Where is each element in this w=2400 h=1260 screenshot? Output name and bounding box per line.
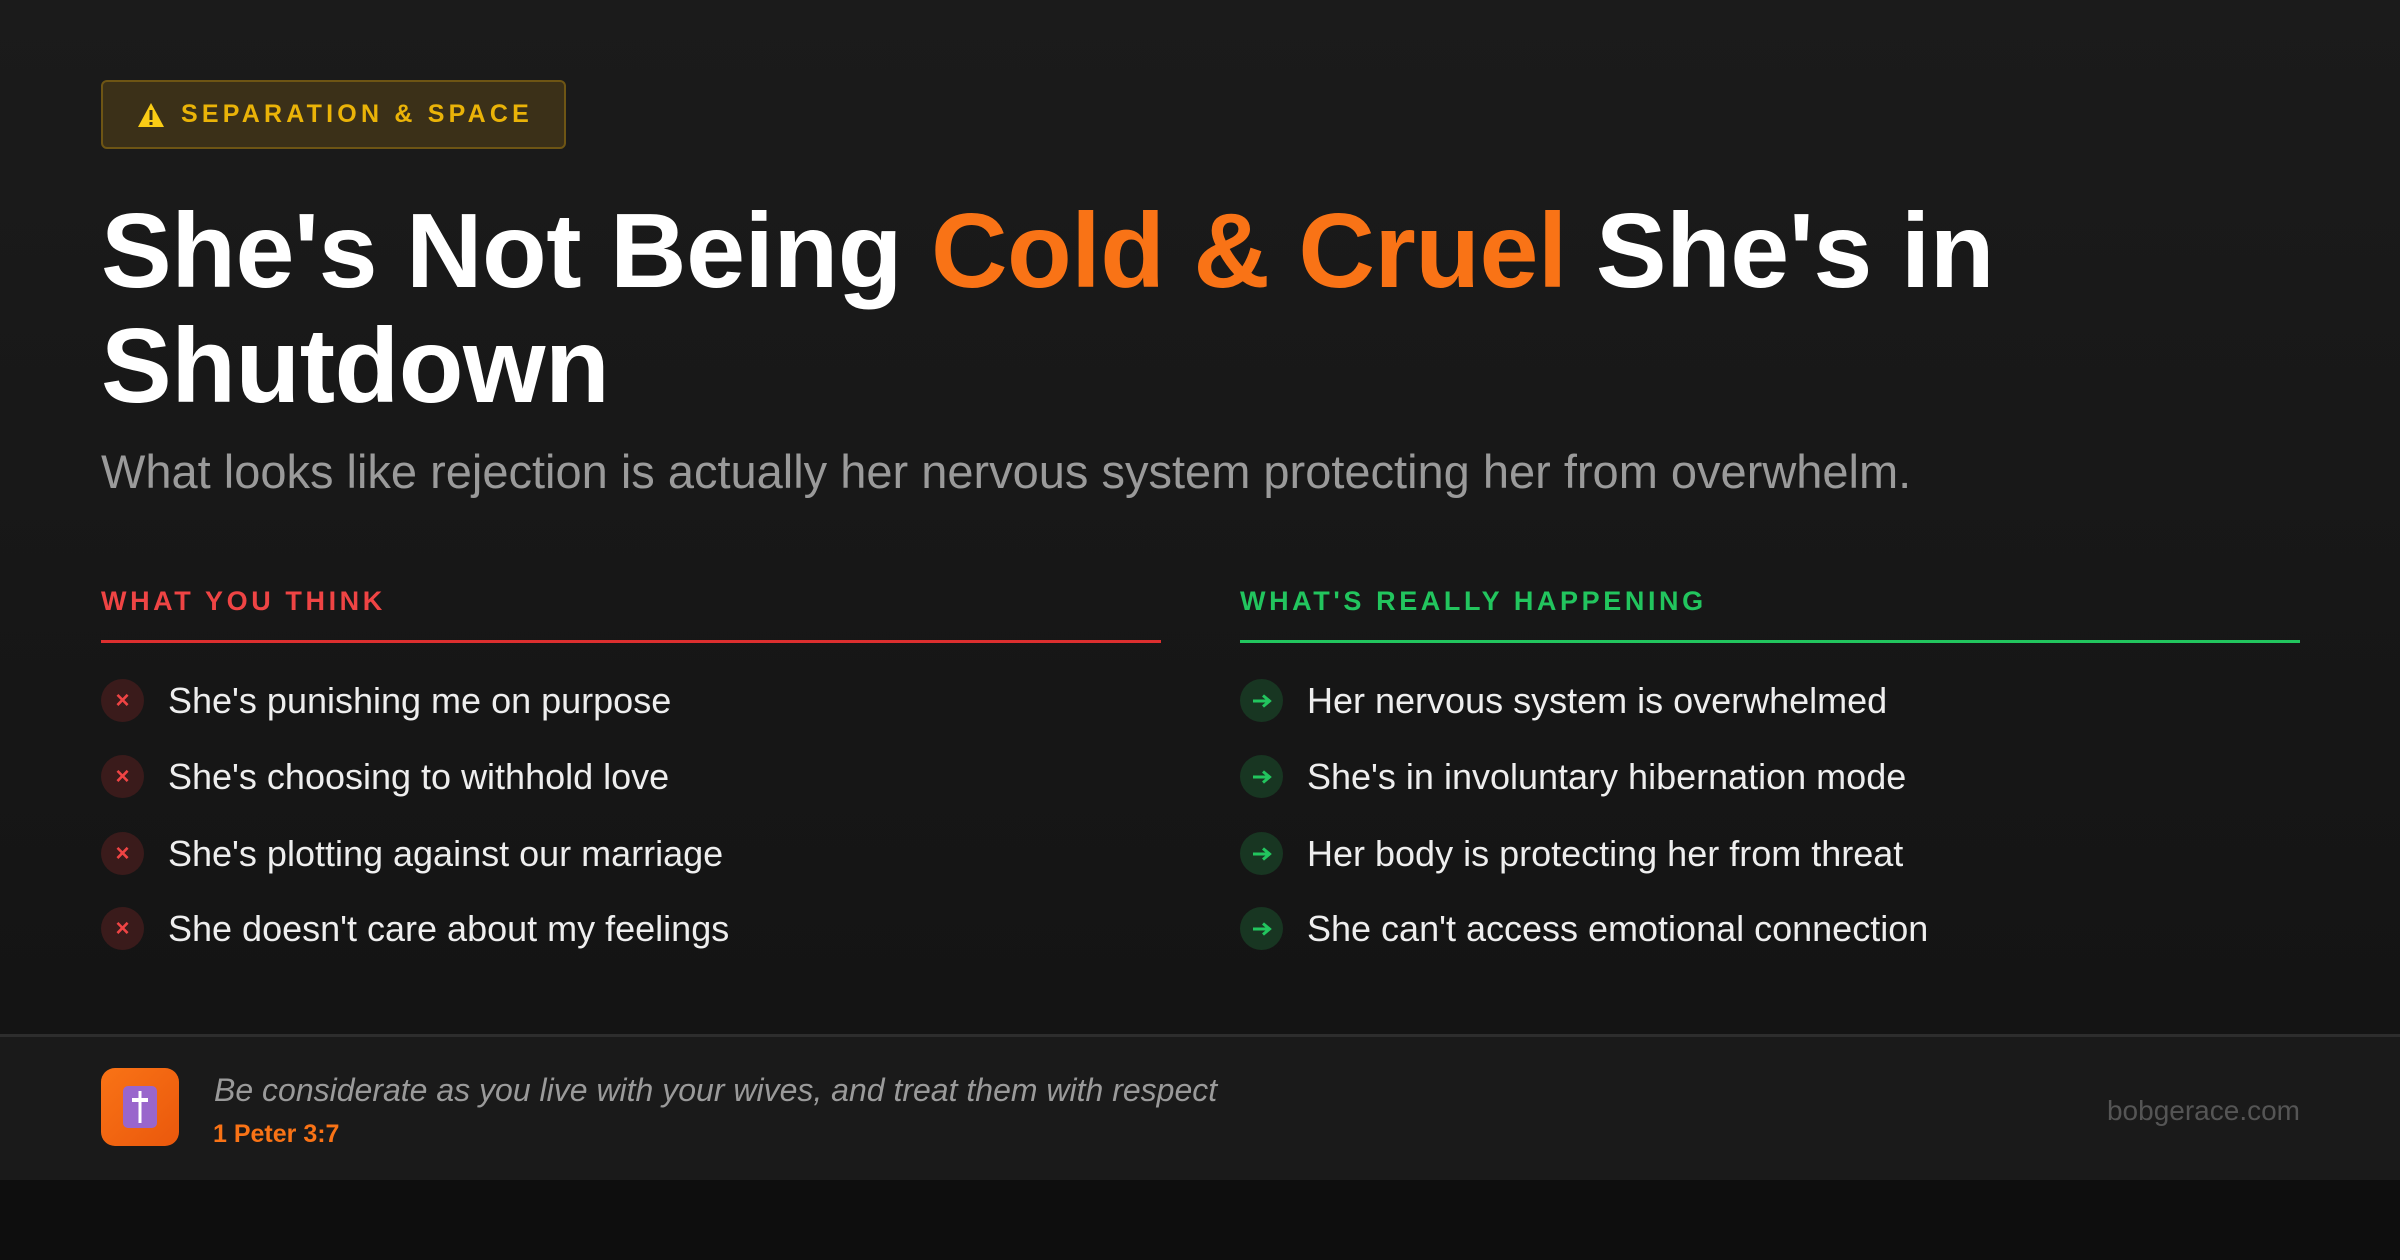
reference: 1 Peter 3:7 [213, 1120, 339, 1148]
title [101, 192, 1994, 425]
item 2: She's choosing to withhold love [168, 756, 669, 796]
item 1: × [115, 686, 130, 714]
item 4: She doesn't care about my feelings [168, 908, 729, 948]
quote: Be considerate as you live with your wives, and treat them with respect [214, 1072, 1217, 1108]
heading: what you think: WHAT YOU THINK [101, 586, 386, 616]
item 4: She can't access emotional connection [1307, 908, 1928, 948]
title: She's Not Being Cold & Cruel She's in [101, 192, 1994, 310]
subtitle: What looks like rejection is actually her nervous system protecting her from overwhelm. [101, 445, 1911, 498]
item 2: × [115, 762, 130, 790]
heading: what's really happening: WHAT'S REALLY HAPPENING [1240, 586, 1707, 616]
item 3: × [115, 840, 130, 866]
title: Shutdown [101, 307, 609, 425]
item 3: She's plotting against our marriage [168, 832, 723, 874]
badge: separation & space: SEPARATION & SPACE [181, 100, 533, 128]
footer [0, 1034, 2400, 1180]
panel: what you think [101, 586, 1161, 950]
item 1: She's punishing me on purpose [168, 680, 671, 720]
item 1: Her nervous system is overwhelmed [1307, 680, 1887, 720]
item 4: × [115, 914, 130, 942]
badge: separation & space [101, 80, 566, 149]
item 3: Her body is protecting her from threat [1307, 832, 1903, 874]
website: bobgerace.com [2107, 1095, 2300, 1126]
item 2: She's in involuntary hibernation mode [1307, 756, 1906, 796]
panel: what's really happening [1240, 586, 2300, 950]
icon: cross [101, 1068, 179, 1146]
